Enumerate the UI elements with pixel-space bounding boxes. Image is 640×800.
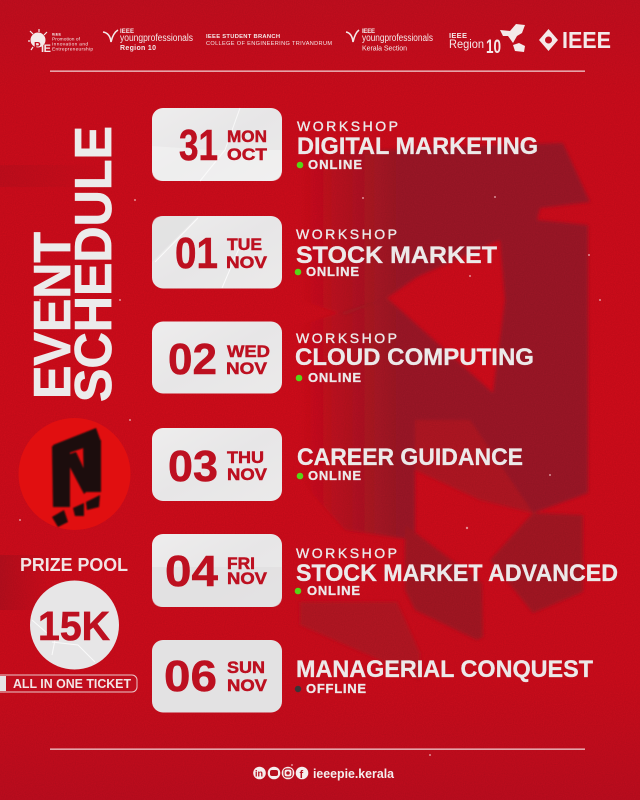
event text: OFFLINE: [306, 681, 366, 696]
event schedule vertical title: SCHEDULE: [65, 126, 123, 402]
event 3: [152, 322, 534, 394]
logo: IEEE PIE: Innovation and: [52, 42, 88, 48]
logo: young professionals Kerala: Kerala Section: [362, 46, 407, 52]
handle: ieeepie.kerala: [313, 767, 395, 781]
event text: [295, 330, 534, 385]
date card: [152, 108, 282, 181]
logo: IEEE Region 10: IEEE: [449, 31, 467, 40]
event text: DIGITAL MARKETING: [297, 133, 538, 160]
event text: STOCK MARKET ADVANCED: [296, 560, 618, 587]
event text: WORKSHOP: [297, 118, 398, 134]
logo: IEEE young professionals Region 10: Region 10: [120, 45, 156, 52]
date card: [152, 534, 282, 607]
event 4: [152, 428, 523, 501]
logo: young professionals Kerala: youngprofessionals: [362, 33, 433, 44]
event schedule vertical title: EVENT: [24, 232, 82, 399]
event text: [297, 118, 538, 172]
prize pool heading: PRIZE POOL: [20, 554, 128, 575]
icon: linkedin: in: [255, 768, 263, 778]
logo: IEEE PIE: IE: [41, 43, 51, 55]
event text: ONLINE: [308, 157, 362, 172]
prize pool: [0, 554, 137, 692]
date card: MON: [227, 127, 267, 146]
event 2: [152, 216, 497, 288]
date card: NOV: [227, 465, 268, 484]
event 1: [152, 108, 538, 181]
event text: MANAGERIAL CONQUEST: [296, 656, 593, 683]
date card: 02: [168, 335, 217, 384]
event text: WORKSHOP: [296, 545, 397, 561]
date card: 03: [168, 442, 218, 491]
logo: student branch: COLLEGE OF ENGINEERING TRIVANDRUM: [206, 41, 332, 47]
date card: THU: [227, 448, 264, 467]
date card: SUN: [227, 658, 265, 677]
icon: instagram: [282, 767, 294, 779]
event 5: [152, 534, 618, 607]
event text: [295, 545, 618, 598]
event text: CAREER GUIDANCE: [297, 444, 523, 471]
event text: ONLINE: [308, 370, 361, 385]
header logos: [28, 24, 611, 58]
prize circle: [30, 580, 119, 670]
logo: IEEE young professionals Region 10: youngprofessionals: [120, 33, 193, 44]
prize circle: 15K: [38, 603, 110, 649]
logo: IEEE: IEEE: [562, 27, 611, 53]
event text: [297, 444, 523, 483]
event 6: [152, 640, 593, 712]
icon: facebook: f: [300, 769, 304, 781]
date card: 06: [164, 652, 217, 701]
event text: [295, 226, 497, 279]
icon: facebook: [296, 767, 308, 781]
date card: NOV: [226, 359, 268, 378]
date card: 01: [175, 229, 218, 278]
icon: linkedin: [253, 767, 266, 779]
date card: NOV: [226, 253, 268, 272]
event text: STOCK MARKET: [296, 242, 497, 269]
event text: ONLINE: [307, 583, 360, 598]
date card: [152, 428, 282, 501]
logo: IEEE PIE: IEEE: [52, 32, 61, 36]
logo: IEEE Region 10: 10: [486, 37, 501, 58]
logo: young professionals Kerala: [346, 29, 433, 52]
logo: IEEE PIE: P: [34, 41, 41, 52]
date card: 31: [179, 121, 218, 170]
large faded N watermark: [300, 143, 590, 680]
logo: IEEE Region 10: [449, 24, 525, 58]
event text: WORKSHOP: [296, 330, 397, 346]
event schedule vertical title: [24, 126, 123, 402]
event text: CLOUD COMPUTING: [295, 344, 534, 371]
date card: WED: [227, 342, 270, 361]
date card: OCT: [227, 145, 268, 164]
date card: [152, 216, 282, 288]
logo: IEEE PIE: Promotion of: [52, 36, 81, 42]
date card: TUE: [227, 235, 262, 254]
logo: IEEE Region 10: Region: [449, 39, 484, 51]
icon: youtube: [268, 767, 280, 779]
event text: WORKSHOP: [296, 226, 397, 242]
date card: [152, 640, 282, 712]
date card: NOV: [227, 569, 268, 588]
logo: IEEE: [539, 27, 611, 53]
event logo circle: [18, 418, 130, 530]
date card: FRI: [227, 554, 255, 573]
logo: IEEE PIE: [28, 29, 93, 55]
event text: ONLINE: [308, 468, 361, 483]
logo: young professionals Kerala: IEEE: [362, 29, 375, 35]
footer social: [253, 767, 395, 781]
logo: IEEE young professionals Region 10: [103, 29, 193, 52]
logo: student branch: IEEE STUDENT BRANCH: [206, 34, 280, 40]
logo: IEEE PIE: Entrepreneurship: [52, 46, 93, 52]
logo: student branch: [206, 34, 332, 47]
date card: NOV: [227, 676, 268, 695]
ticket label: ALL IN ONE TICKET: [13, 677, 131, 691]
date card: [152, 322, 282, 394]
event text: [295, 656, 593, 696]
date card: 04: [165, 547, 219, 596]
logo: IEEE young professionals Region 10: IEEE: [120, 29, 134, 35]
event text: ONLINE: [306, 264, 359, 279]
